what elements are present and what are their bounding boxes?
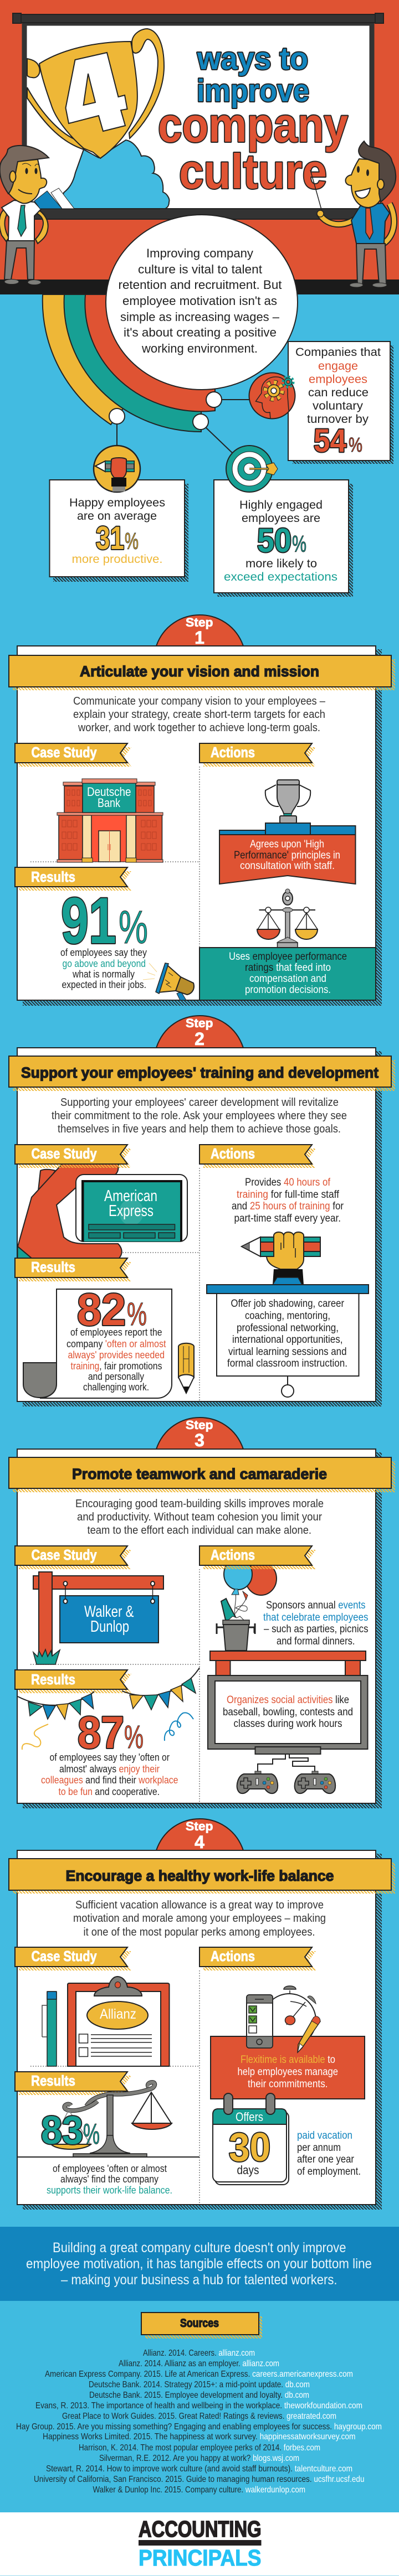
stat: 83%: 83 bbox=[41, 2109, 83, 2153]
step 3 description: Encouraging good team-building skills improves morale bbox=[75, 1498, 324, 1510]
logo: Accounting Principals: PRINCIPALS bbox=[139, 2545, 262, 2570]
step 1 badge: 1 bbox=[195, 628, 204, 648]
step 3 badge: 3 bbox=[195, 1430, 204, 1450]
step 2 badge: 2 bbox=[195, 1029, 204, 1049]
stat: 82% on scroll: training, fair promotions bbox=[71, 1361, 162, 1372]
action: high performance principles: consultation with staff. bbox=[240, 860, 335, 872]
action: calendar 30 days: Offers bbox=[236, 2110, 263, 2124]
step 2 description: themselves in five years and help them to achieve those goals. bbox=[58, 1123, 341, 1135]
step 1 description bbox=[73, 695, 326, 734]
stat: 87%: % bbox=[124, 1719, 144, 1755]
action: social activities on TV: classes during work hours bbox=[234, 1718, 342, 1730]
title: company bbox=[158, 97, 348, 152]
action: high performance principles: Agrees upon 'High bbox=[250, 839, 324, 850]
heading: step 1: Articulate your vision and mission bbox=[80, 663, 319, 680]
heading: sources: Sources bbox=[180, 2317, 219, 2330]
step 2 section bbox=[9, 1016, 395, 1406]
ribbon: actions: Actions bbox=[211, 1546, 255, 1563]
step 1 badge bbox=[156, 615, 243, 648]
ribbon: actions bbox=[200, 1145, 316, 1168]
illustration: American Express tablet in hand: Express bbox=[109, 1202, 154, 1220]
illustration: balance scale bbox=[51, 2082, 172, 2157]
sources list: Evans, R. 2013. The importance of health and wellbeing in the workplace. theworkfoundation.com bbox=[35, 2401, 362, 2411]
stat: 82% on scroll: challenging work. bbox=[83, 1382, 149, 1393]
step 3 description bbox=[75, 1498, 324, 1537]
step 2 description bbox=[52, 1096, 347, 1135]
step 4 badge: Step bbox=[186, 1819, 213, 1833]
stat: 87%: to be fun and cooperative. bbox=[59, 1786, 160, 1797]
heading: step 4: Encourage a healthy work-life balance bbox=[65, 1868, 334, 1884]
callout: 54% turnover: voluntary bbox=[313, 400, 364, 412]
step 2 description: Supporting your employees' career development will revitalize bbox=[60, 1096, 339, 1109]
callout: 54% turnover: % bbox=[349, 433, 362, 456]
step 3 description: team to the effort each individual can make alone. bbox=[88, 1524, 311, 1537]
step 3 badge bbox=[156, 1418, 243, 1450]
sources list: Hay Group. 2015. Are you missing something? Engaging and enabling employees for success. haygroup.com bbox=[16, 2422, 382, 2432]
sources list: Allianz. 2014. Careers. allianz.com bbox=[143, 2349, 255, 2358]
illustration: Walker and Dunlop sign: Dunlop bbox=[90, 1618, 129, 1636]
action: training hours: and 25 hours of training for bbox=[232, 1201, 344, 1212]
stat: 91%: % bbox=[119, 901, 148, 953]
step 2 description: their commitment to the role. Ask your employees where they see bbox=[52, 1110, 347, 1122]
illustration: balloons and champagne bbox=[217, 1559, 277, 1651]
stat: 91%: go above and beyond bbox=[62, 958, 146, 969]
action: events: and formal dinners. bbox=[277, 1636, 355, 1647]
stat: 82% on scroll: 82 bbox=[77, 1285, 126, 1335]
panel: happy employees 31% bbox=[50, 480, 188, 582]
step 4 description: it one of the most popular perks among employees. bbox=[83, 1926, 315, 1938]
sources list: Great Place to Work Guides. 2015. Great Rated! Ratings & reviews. greatrated.com bbox=[62, 2412, 336, 2421]
sources list bbox=[16, 2349, 382, 2495]
action: calendar 30 days: days bbox=[237, 2163, 259, 2177]
illustration: Deutsche Bank building: Bank bbox=[98, 796, 121, 810]
ribbon: results: Results bbox=[31, 868, 75, 885]
panel: happy employees 31%: Happy employees bbox=[69, 496, 165, 509]
stat: 91%: expected in their jobs. bbox=[62, 979, 146, 990]
stat: 87%: 87 bbox=[78, 1708, 124, 1758]
sources list: Allianz. 2014. Allianz as an employer. allianz.com bbox=[119, 2359, 279, 2368]
sources list: Stewart, R. 2014. How to improve work culture (and avoid staff burnouts). talentculture.com bbox=[46, 2464, 352, 2474]
ribbon: results hatch bbox=[19, 2076, 131, 2095]
title: ways to bbox=[197, 41, 308, 76]
action: training hours: part-time staff every year. bbox=[234, 1213, 341, 1224]
action: social activities on TV bbox=[208, 1675, 368, 1754]
panel: happy employees 31%: 31 bbox=[96, 520, 124, 556]
sources list: Deutsche Bank. 2015. Employee development and loyalty. db.com bbox=[89, 2391, 309, 2400]
illustration: Deutsche Bank building bbox=[57, 779, 163, 862]
projector screen bbox=[13, 13, 383, 219]
action: social activities on TV: baseball, bowling, contests and bbox=[223, 1706, 353, 1718]
icon: scales bbox=[257, 889, 318, 948]
callout: 54% turnover: employees bbox=[309, 373, 367, 386]
ribbon: results bbox=[15, 1670, 131, 1693]
step 4 section bbox=[9, 1819, 395, 2210]
stat: 91%: of employees say they bbox=[60, 947, 147, 958]
callout: 54% turnover: engage bbox=[318, 360, 358, 373]
step 3 section bbox=[9, 1418, 395, 1808]
intro circle: working environment. bbox=[141, 342, 258, 355]
callout: 54% turnover: 54 bbox=[314, 423, 346, 459]
stat: 82% on scroll bbox=[23, 1285, 172, 1398]
action: flip chart development bbox=[217, 1294, 359, 1397]
icon: hand holding pencil on stand bbox=[207, 1232, 369, 1294]
intro circle: Improving company bbox=[146, 246, 253, 260]
action: flexitime: Flexitime is available to bbox=[241, 2054, 335, 2066]
icon: hand on cloud bbox=[59, 140, 169, 209]
action: events: Sponsors annual events bbox=[266, 1600, 366, 1611]
heading: step 4 bbox=[9, 1859, 391, 1890]
panel: engaged employees 50%: 50 bbox=[257, 522, 291, 559]
ribbon: case study bbox=[15, 1546, 131, 1569]
step 4 badge: 4 bbox=[195, 1832, 204, 1852]
sources list: Deutsche Bank. 2014. Strategy 2015+: a mid-point update. db.com bbox=[89, 2380, 310, 2389]
step 1 description: Communicate your company vision to your employees – bbox=[73, 695, 326, 707]
panel: engaged employees 50%: exceed expectations bbox=[224, 571, 337, 583]
step 1 description: worker, and work together to achieve long-term goals. bbox=[78, 722, 320, 734]
intro circle: it's about creating a positive bbox=[124, 325, 277, 339]
stat: 91%: 91 bbox=[61, 884, 116, 958]
panel: happy employees 31%: more productive. bbox=[72, 553, 163, 566]
heading: sources bbox=[141, 2313, 262, 2339]
ribbon: results bbox=[15, 867, 131, 891]
step 1 badge: Step bbox=[186, 615, 213, 629]
ribbon: case study bbox=[15, 743, 131, 767]
action: events: – such as parties, picnics bbox=[264, 1623, 368, 1635]
ribbon: results: Results bbox=[31, 1671, 75, 1688]
action: calendar 30 days: 30 bbox=[229, 2125, 270, 2170]
action: flexitime bbox=[211, 1986, 365, 2099]
stat: 83% bbox=[17, 2109, 200, 2196]
sources list: Harrison, K. 2014. The most popular employee perks of 2014. forbes.com bbox=[79, 2443, 320, 2453]
logo: Accounting Principals bbox=[139, 2516, 262, 2570]
sources list: Happiness Works Limited. 2015. The happiness at work survey. happinessatworksurvey.com bbox=[43, 2432, 356, 2441]
action: high performance principles bbox=[219, 835, 356, 884]
sources list: Silverman, R.E. 2012. Are you happy at work? blogs.wsj.com bbox=[99, 2454, 299, 2463]
stat: 83%: of employees 'often or almost bbox=[53, 2163, 167, 2174]
icon: megaphone bbox=[143, 963, 194, 1000]
heading: step 3 bbox=[9, 1457, 391, 1488]
icon: trophy with number 4 bbox=[27, 29, 164, 158]
action: flip chart development: international opportunities, bbox=[232, 1334, 342, 1346]
stat: 87%: almost' always enjoy their bbox=[59, 1763, 160, 1775]
step 4 badge bbox=[156, 1819, 243, 1852]
illustration: American Express tablet in hand: American bbox=[104, 1187, 157, 1205]
icon: target with arrow bbox=[226, 446, 278, 492]
action: flexitime: their commitments. bbox=[248, 2078, 328, 2090]
step 1 section bbox=[9, 615, 395, 1006]
action: training hours bbox=[232, 1177, 344, 1224]
step 2 badge: Step bbox=[186, 1016, 213, 1030]
action: flip chart development: virtual learning sessions and bbox=[228, 1346, 347, 1358]
ribbon: case study: Case Study bbox=[31, 1145, 97, 1162]
decorative rings around intro circle bbox=[43, 294, 215, 432]
action: flip chart development: professional networking, bbox=[237, 1322, 339, 1334]
panel: engaged employees 50% bbox=[214, 480, 353, 597]
stat: 82% on scroll: and personally bbox=[88, 1371, 144, 1382]
stat: 82% on scroll: company 'often or almost bbox=[66, 1338, 166, 1349]
conclusion band text bbox=[26, 2240, 372, 2288]
stat: 87%: colleagues and find their workplace bbox=[41, 1775, 178, 1786]
stat: 91%: what is normally bbox=[72, 969, 135, 980]
intro circle: retention and recruitment. But bbox=[119, 278, 282, 292]
action: flexitime: help employees manage bbox=[237, 2066, 338, 2078]
illustration: Deutsche Bank building: Deutsche bbox=[87, 785, 131, 799]
action: calendar 30 days: paid vacation bbox=[297, 2130, 352, 2142]
illustration: Walker and Dunlop sign bbox=[33, 1572, 163, 1664]
intro circle: employee motivation isn't as bbox=[122, 294, 277, 308]
ribbon: results: Results bbox=[31, 2072, 75, 2089]
ribbon: case study bbox=[15, 1947, 131, 1970]
step 3 badge: Step bbox=[186, 1418, 213, 1432]
icon: hand holding pencil bbox=[94, 446, 140, 492]
ribbon: case study: Case Study bbox=[31, 744, 97, 761]
heading: step 2 bbox=[9, 1056, 391, 1087]
sources list: University of California, San Francisco. 2015. Guide to managing human resources. ucsfhr.ucsf.edu bbox=[34, 2475, 365, 2484]
stat: 83%: always' find the company bbox=[60, 2174, 158, 2185]
title bbox=[158, 41, 348, 199]
action: events bbox=[263, 1600, 368, 1647]
callout: 54% turnover: can reduce bbox=[308, 386, 369, 399]
panel: engaged employees 50%: % bbox=[292, 531, 306, 557]
heading: step 1 bbox=[9, 655, 391, 687]
action: performance ratings: Uses employee performance bbox=[229, 951, 347, 963]
action: performance ratings bbox=[200, 948, 376, 1000]
stat: 83%: % bbox=[83, 2118, 100, 2150]
action: performance ratings: ratings that feed into bbox=[245, 962, 331, 974]
title: culture bbox=[179, 144, 327, 199]
step 1 description: explain your strategy, create short-term targets for each bbox=[73, 708, 325, 721]
icon: silver trophy on podium bbox=[219, 780, 356, 835]
callout: 54% turnover: Companies that bbox=[295, 346, 381, 359]
callout: 54% turnover: turnover by bbox=[307, 413, 369, 426]
action: social activities on TV: Organizes social activities like bbox=[227, 1694, 349, 1706]
action: calendar 30 days bbox=[213, 2093, 361, 2185]
stat: 87% bbox=[41, 1708, 178, 1797]
illustration: Walker and Dunlop sign: Walker & bbox=[84, 1603, 134, 1621]
icon: table bbox=[210, 1651, 366, 1675]
ribbon: actions: Actions bbox=[211, 1145, 255, 1162]
step 4 description bbox=[73, 1899, 326, 1938]
stat: 82% on scroll: of employees report the bbox=[70, 1327, 162, 1338]
panel: happy employees 31%: % bbox=[125, 528, 139, 554]
action: high performance principles: Performance' principles in bbox=[234, 850, 340, 861]
step 3 description: and productivity. Without team cohesion you limit your bbox=[77, 1511, 322, 1523]
action: flip chart development: formal classroom instruction. bbox=[227, 1358, 347, 1369]
action: calendar 30 days: per annum bbox=[297, 2142, 341, 2154]
ribbon: results: Results bbox=[31, 1259, 75, 1275]
step 4 description: motivation and morale among your employees – making bbox=[73, 1912, 326, 1925]
stat: 82% on scroll: always' provides needed bbox=[68, 1349, 165, 1361]
stat: 83%: supports their work-life balance. bbox=[47, 2185, 172, 2196]
intro circle: culture is vital to talent bbox=[138, 262, 262, 276]
conclusion band text: Building a great company culture doesn't only improve bbox=[53, 2240, 346, 2256]
action: training hours: Provides 40 hours of bbox=[245, 1177, 331, 1188]
action: flip chart development: coaching, mentoring, bbox=[245, 1310, 330, 1322]
sources list: American Express Company. 2015. Life at American Express. careers.americanexpress.com bbox=[45, 2370, 353, 2379]
action: events: that celebrate employees bbox=[263, 1612, 368, 1623]
ribbon: actions: Actions bbox=[211, 744, 255, 761]
title: improve bbox=[197, 73, 309, 108]
connector lines bbox=[117, 400, 250, 453]
illustration: American Express tablet in hand bbox=[18, 1164, 187, 1258]
ribbon: results bbox=[15, 1258, 131, 1281]
ribbon: case study: Case Study bbox=[31, 1948, 97, 1964]
illustration: bunting flags bbox=[18, 1668, 200, 1750]
stat: 82% on scroll: % bbox=[127, 1296, 147, 1332]
icon: pencil bbox=[178, 1343, 194, 1393]
ribbon: actions bbox=[200, 1546, 316, 1569]
icon: game controllers bbox=[237, 1754, 335, 1793]
figure: right businessman with pointer bbox=[310, 141, 396, 287]
action: performance ratings: compensation and bbox=[249, 973, 326, 985]
panel: engaged employees 50%: employees are bbox=[242, 512, 320, 525]
action: calendar 30 days: after one year bbox=[297, 2154, 355, 2165]
sources list: Walker & Dunlop Inc. 2015. Company culture. walkerdunlop.com bbox=[93, 2485, 305, 2495]
ribbon: actions: Actions bbox=[211, 1948, 255, 1964]
connector nodes bbox=[109, 392, 222, 430]
action: performance ratings: promotion decisions. bbox=[245, 984, 331, 996]
conclusion band text: – making your business a hub for talented workers. bbox=[61, 2272, 337, 2288]
step 2 badge bbox=[156, 1016, 243, 1049]
illustration: Allianz clipboard and pen bbox=[42, 1977, 170, 2066]
ribbon: actions bbox=[200, 743, 316, 767]
ribbon: case study bbox=[15, 1145, 131, 1168]
panel: engaged employees 50%: Highly engaged bbox=[239, 499, 323, 511]
logo: Accounting Principals: ACCOUNTING bbox=[139, 2516, 262, 2542]
icon: head with gears bbox=[249, 373, 295, 419]
ribbon: case study: Case Study bbox=[31, 1546, 97, 1563]
action: flip chart development: Offer job shadowing, career bbox=[231, 1298, 345, 1310]
ribbon: actions bbox=[200, 1947, 316, 1970]
intro circle bbox=[106, 215, 298, 390]
heading: step 3: Promote teamwork and camaraderie bbox=[72, 1466, 327, 1482]
panel: engaged employees 50%: more likely to bbox=[245, 557, 317, 570]
panel: happy employees 31%: are on average bbox=[77, 510, 157, 523]
step 4 description: Sufficient vacation allowance is a great way to improve bbox=[75, 1899, 324, 1911]
intro circle: simple as increasing wages – bbox=[120, 310, 280, 324]
action: calendar 30 days: of employment. bbox=[297, 2166, 361, 2177]
stat: 91% bbox=[60, 884, 148, 990]
ribbon: results bbox=[15, 2072, 127, 2091]
heading: step 2: Support your employees' training and development bbox=[21, 1064, 378, 1081]
illustration: Allianz clipboard and pen: Allianz bbox=[100, 2006, 136, 2022]
action: training hours: training for full-time staff bbox=[237, 1189, 340, 1201]
stat: 87%: of employees say they 'often or bbox=[50, 1752, 170, 1763]
figure: left businessman bbox=[0, 146, 74, 285]
callout: 54% turnover bbox=[288, 342, 393, 464]
